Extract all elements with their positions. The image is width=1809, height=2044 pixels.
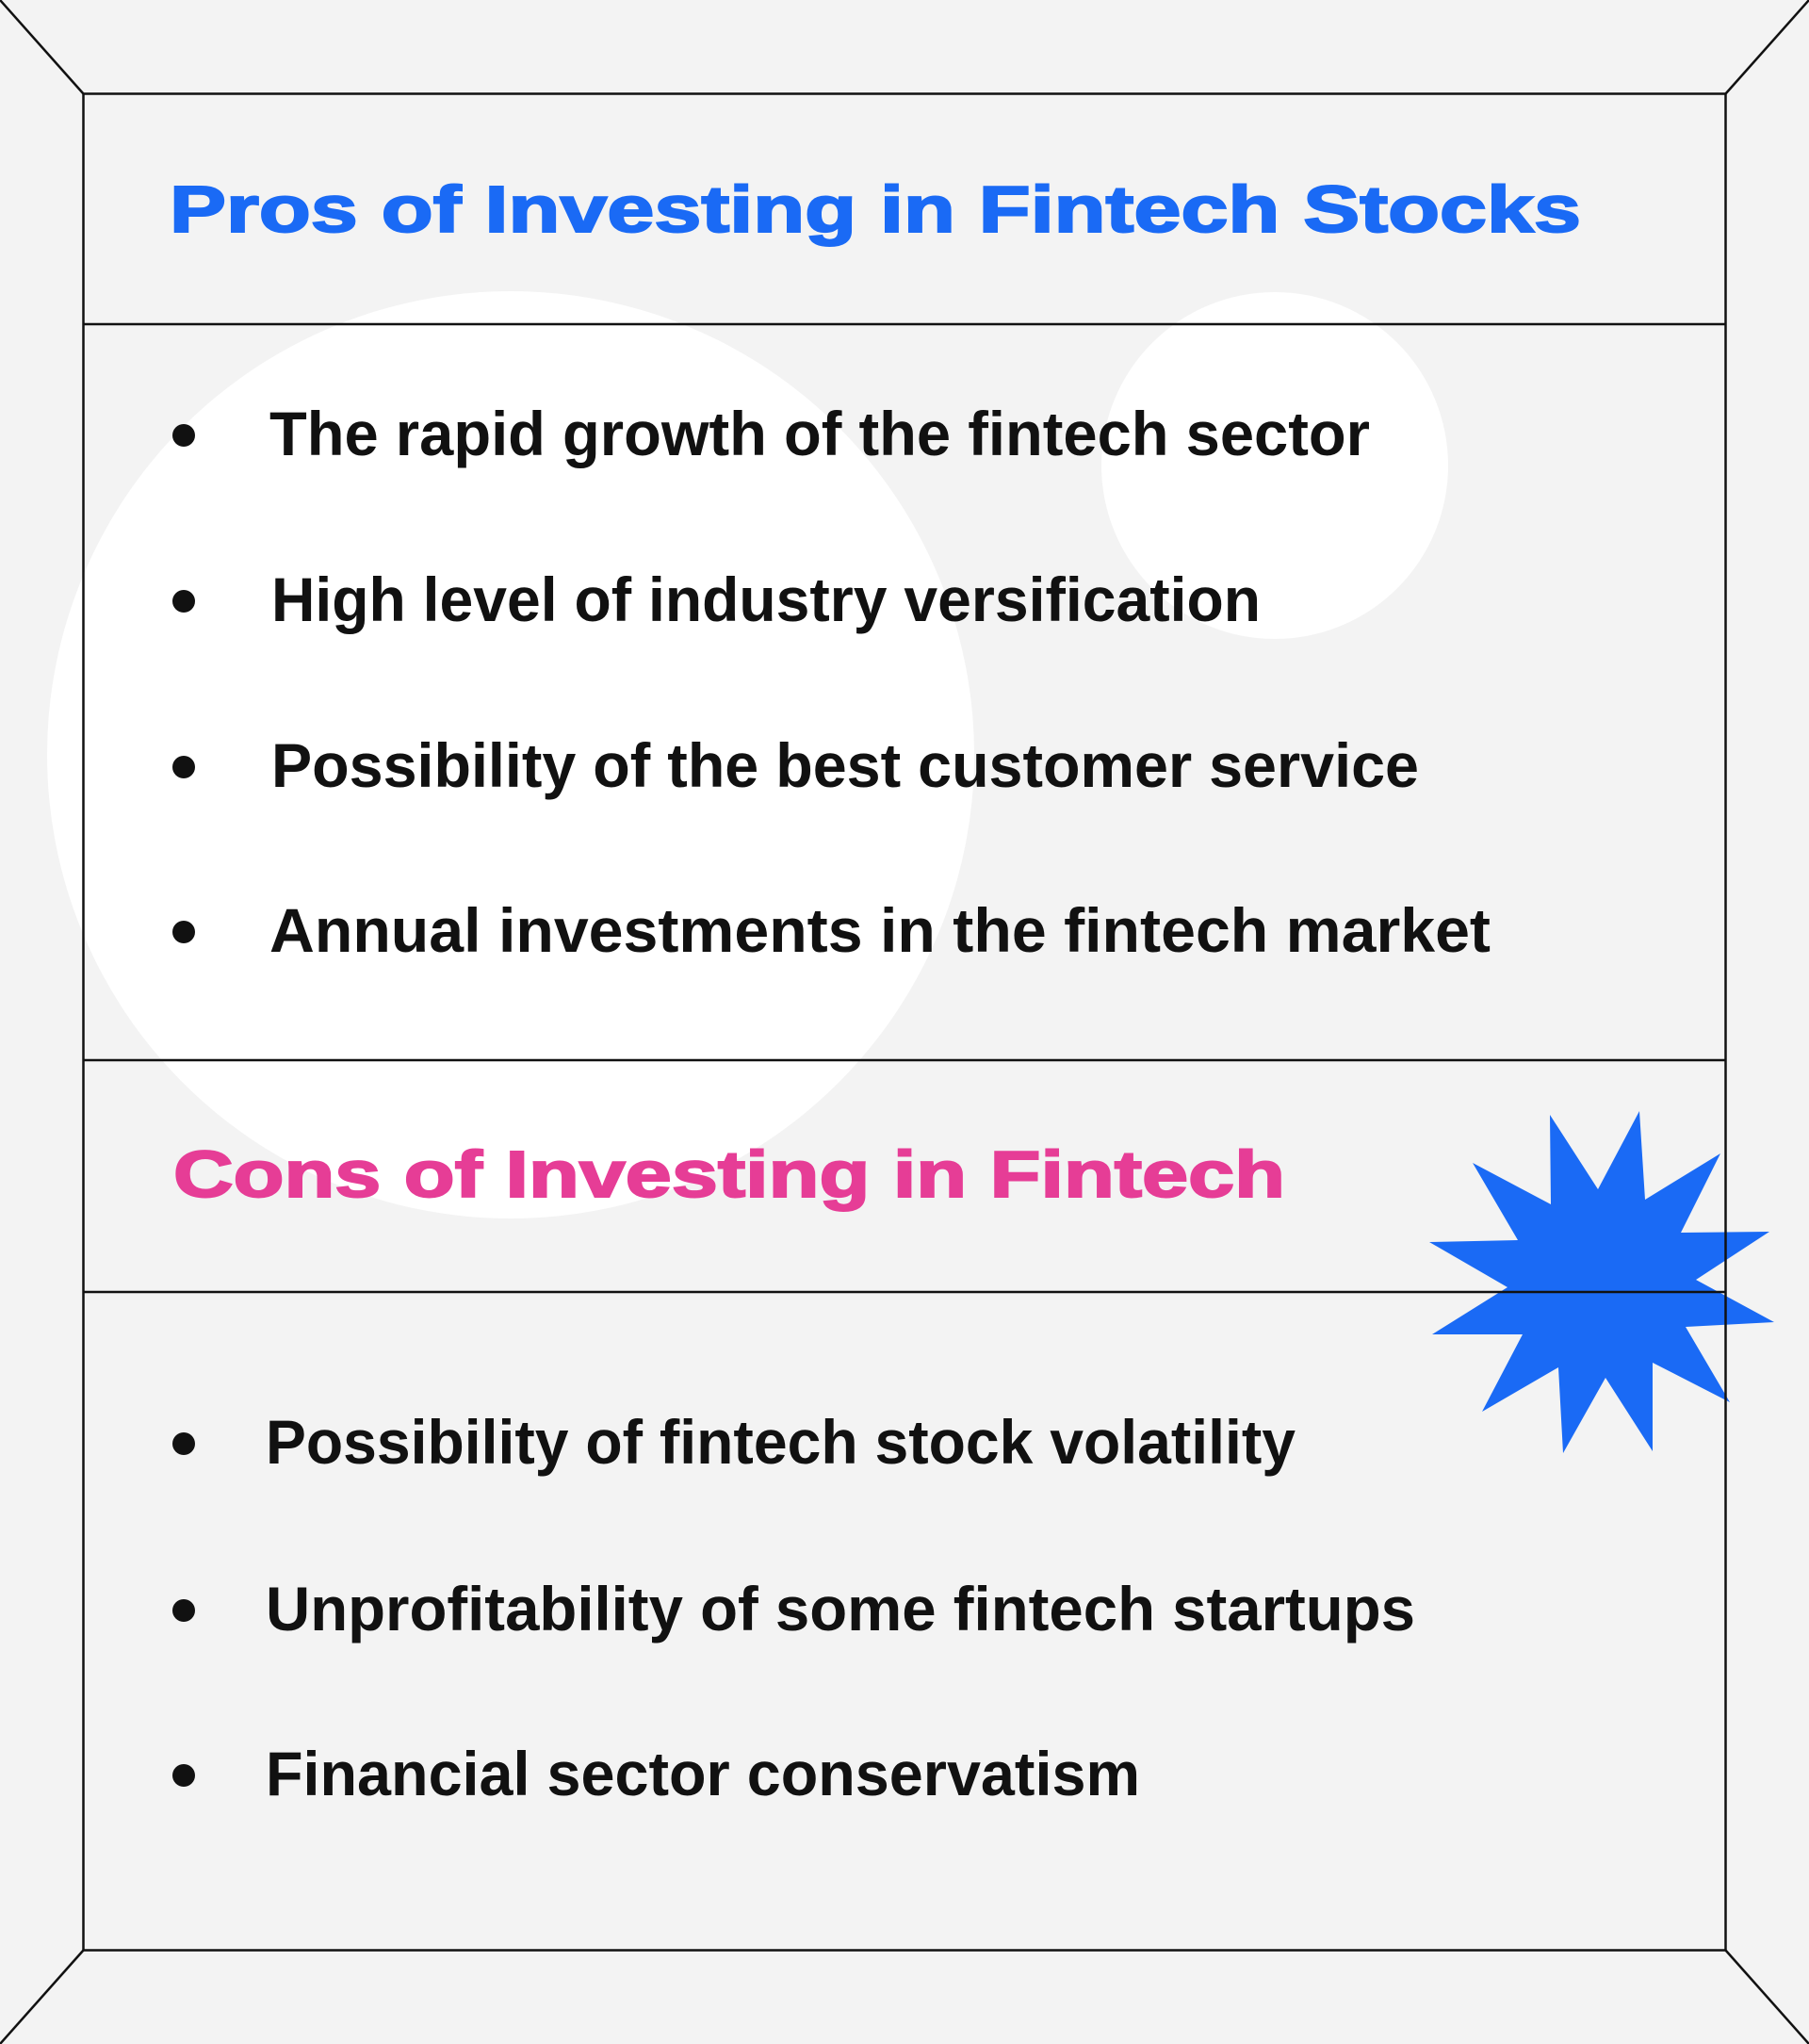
list: pros: The rapid growth of the fintech sector [269, 399, 1370, 468]
title: pros: Pros of Investing in Fintech Stocks [170, 172, 1581, 246]
list: cons: Financial sector conservatism [266, 1739, 1140, 1808]
decorative circle small [1101, 292, 1448, 639]
list: pros [172, 399, 1491, 965]
icon: blue starburst [1429, 1111, 1774, 1453]
list: cons: Possibility of fintech stock volatility [266, 1407, 1296, 1477]
decorative circle large [47, 291, 974, 1218]
title: cons: Cons of Investing in Fintech [173, 1137, 1285, 1211]
list: pros: Possibility of the best customer service [271, 730, 1419, 800]
list: pros: High level of industry versification [271, 564, 1261, 634]
list: cons [172, 1407, 1415, 1808]
list: cons: Unprofitability of some fintech startups [266, 1574, 1415, 1643]
list: pros: Annual investments in the fintech market [269, 895, 1491, 965]
